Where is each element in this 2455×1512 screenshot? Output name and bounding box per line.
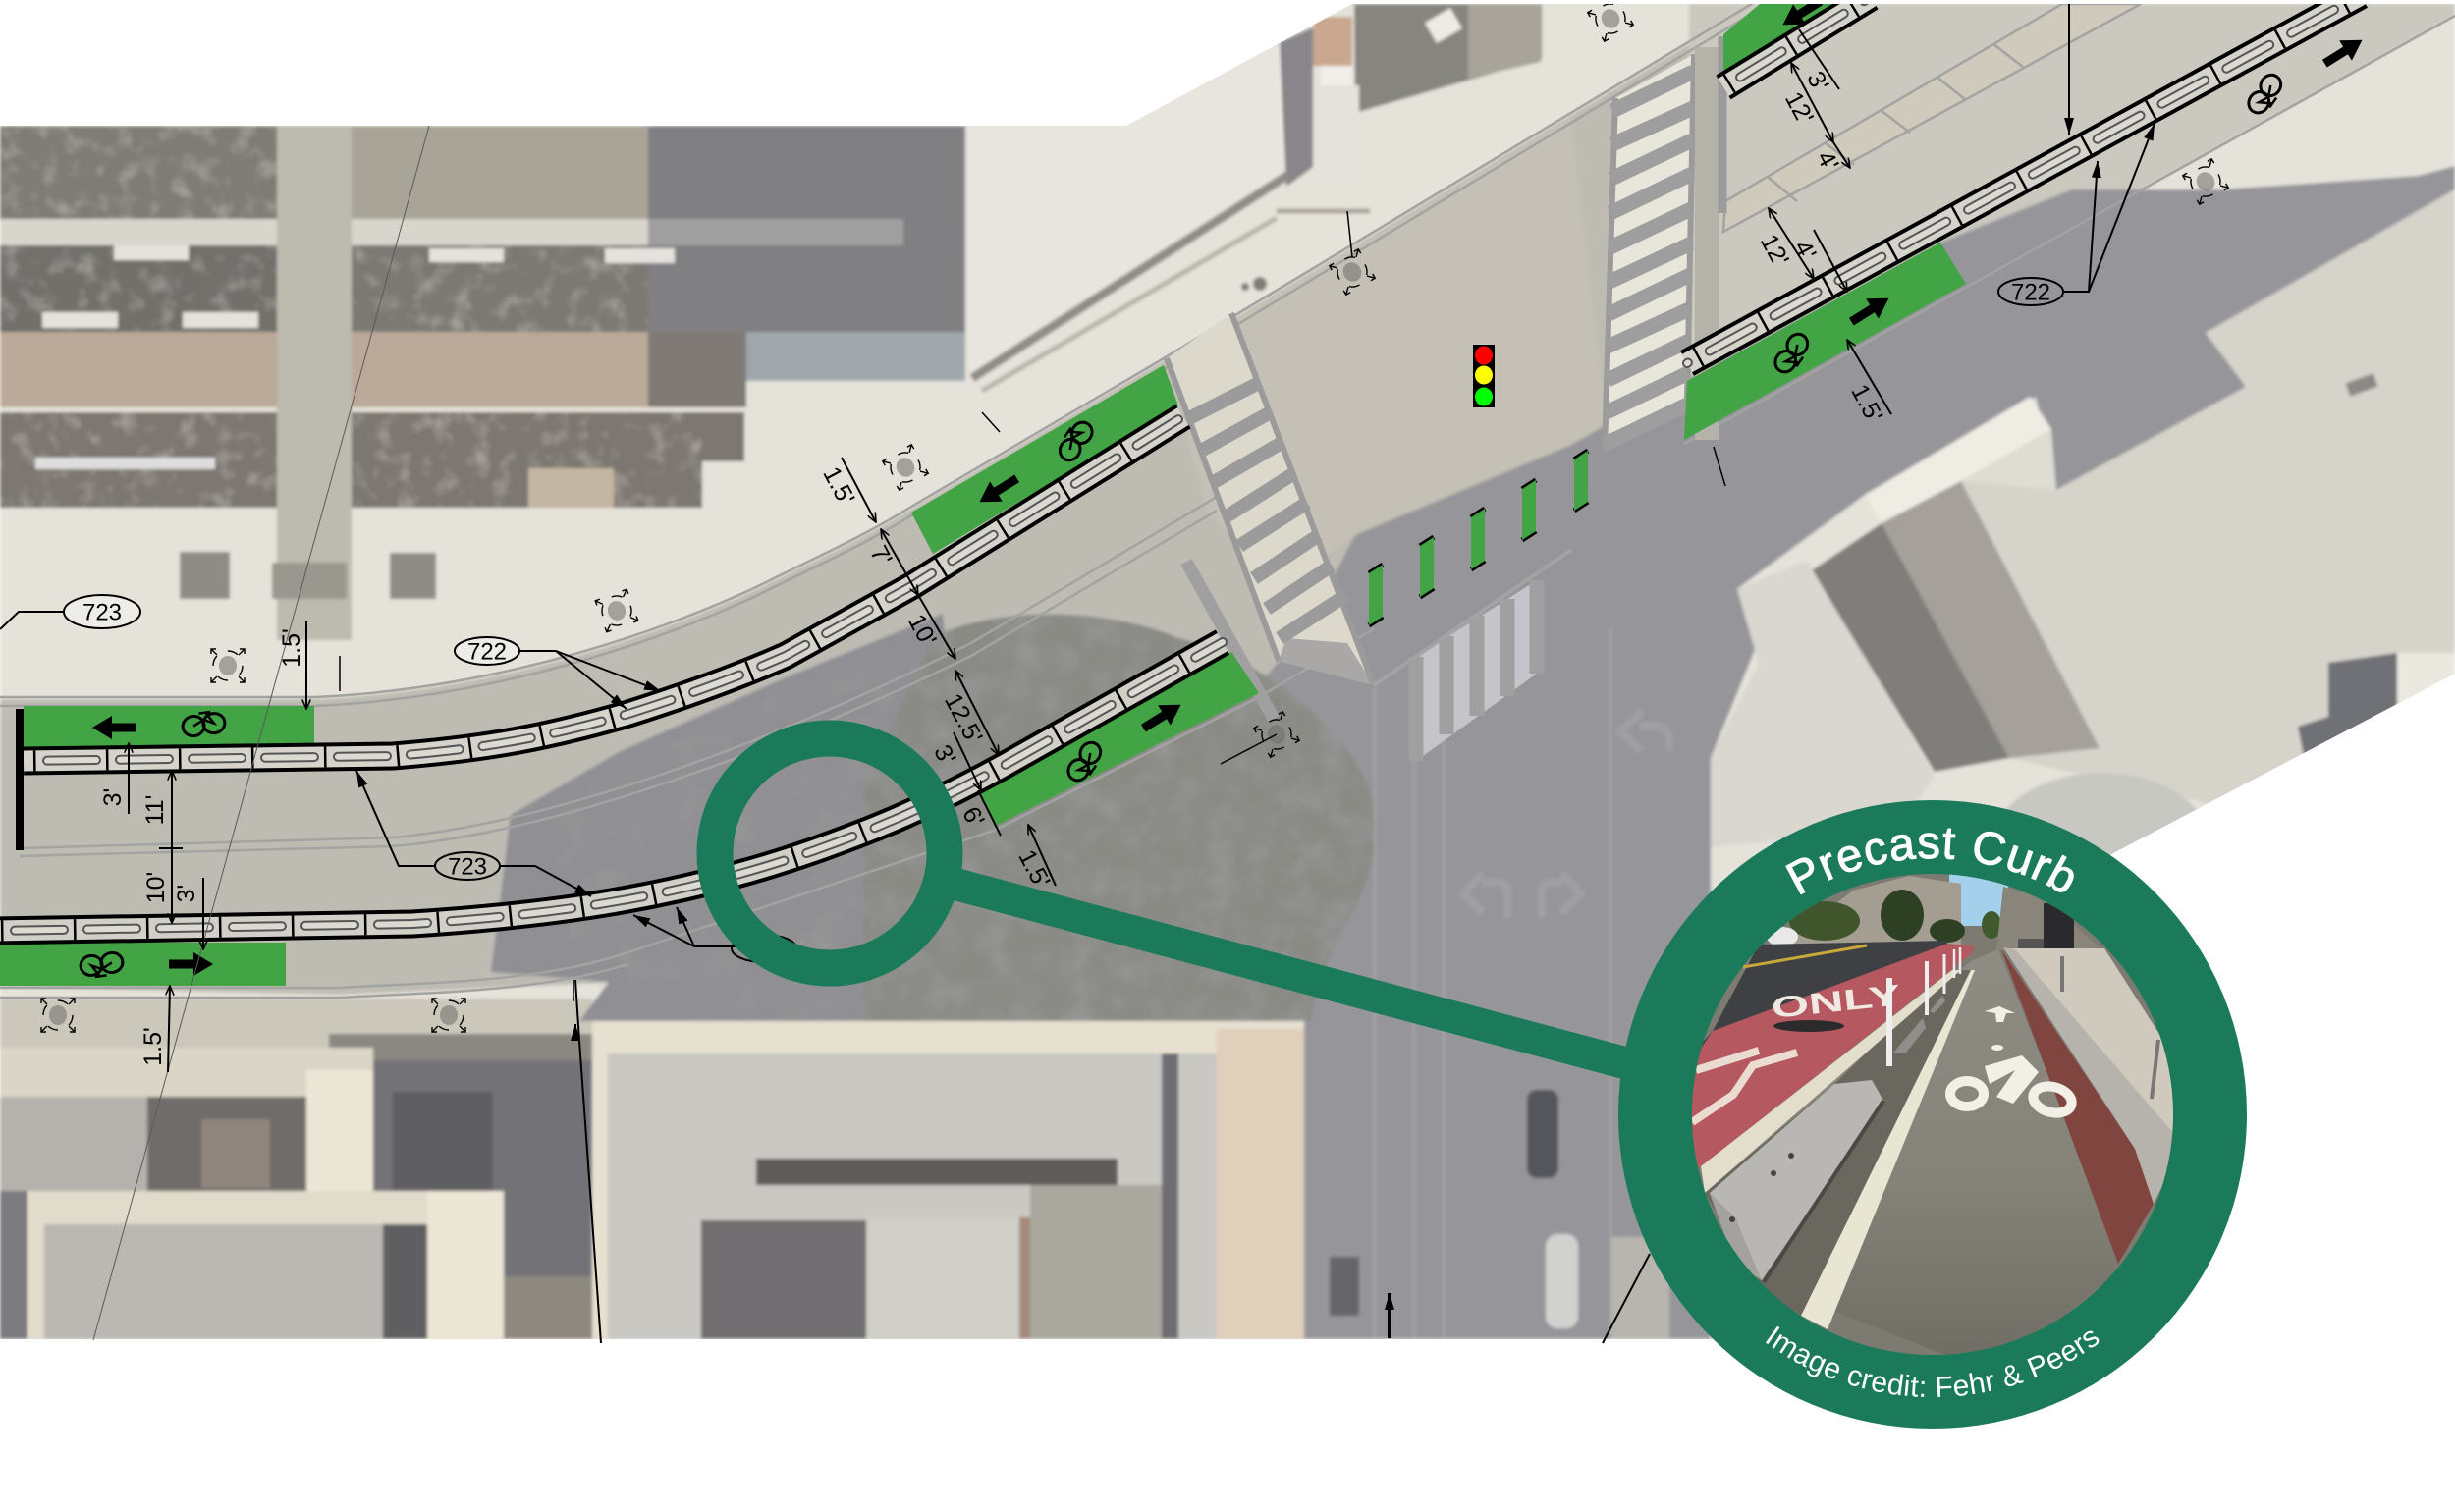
callout: magnifier ring on curb xyxy=(715,738,945,968)
label 722 north east: 722 xyxy=(2011,279,2050,306)
icons: street lights xyxy=(41,0,2228,1032)
building: south east roofs xyxy=(1711,189,2455,920)
label 723 north west xyxy=(64,595,140,628)
dimension values: 1.5' xyxy=(278,628,305,668)
dimension values: 10' xyxy=(902,610,942,651)
label 722 west xyxy=(455,637,519,666)
precast curb band: north east main xyxy=(1687,0,2361,363)
dimension values: 1.5' xyxy=(1845,380,1888,427)
road surface xyxy=(0,43,1691,996)
green bike lane: south diagonal xyxy=(978,652,1259,826)
dimension values: 1.5' xyxy=(139,1027,167,1066)
dimension lines and labels xyxy=(129,29,1891,1072)
building block: north west rooftops xyxy=(0,126,965,640)
callout: precast curb photo roundel xyxy=(1618,800,2247,1429)
green bike lane: west lower xyxy=(0,943,286,986)
building: south centre roof xyxy=(592,1021,1304,1339)
building: north centre roof xyxy=(967,4,1542,391)
dashed green bike crossing xyxy=(1369,451,1588,625)
dimension values: 3' xyxy=(173,885,200,902)
icons: bikes in lanes xyxy=(80,71,2286,979)
label 723 centre xyxy=(435,852,500,880)
green bike lane: north east diagonal xyxy=(1684,243,1966,440)
survey line xyxy=(93,126,429,1340)
crosswalk: north west leg xyxy=(1167,313,1374,719)
dimension values: 3' xyxy=(99,788,127,806)
photo: precast curb on protected bike lane: ONLY xyxy=(1770,979,1902,1025)
crosswalk: south leg xyxy=(1374,550,1571,761)
precast curb band: north east top xyxy=(1723,0,1871,87)
dimension values: 4' xyxy=(1811,146,1844,176)
green bike lane: top xyxy=(1723,4,1850,76)
image credit: Image credit: Fehr & Peers xyxy=(1766,1325,2100,1397)
dimension values: 3' xyxy=(928,740,961,770)
tree canopy xyxy=(864,615,1377,1021)
dimension values: 12' xyxy=(1755,230,1794,271)
dimension values xyxy=(99,67,1888,1066)
dimension values: 12' xyxy=(1779,87,1819,129)
label 722 west: 722 xyxy=(467,638,507,666)
road curb and median linework xyxy=(0,2,2455,998)
lower west sidewalk and buildings xyxy=(0,999,592,1339)
precast curb band: west lower xyxy=(0,642,1223,931)
callout: connector line xyxy=(957,885,1630,1064)
black stop bar xyxy=(16,709,24,850)
photo: precast curb on protected bike lane xyxy=(1692,874,2173,1355)
dimension values: 11' xyxy=(141,795,169,825)
crosswalk: north east leg xyxy=(1605,36,1722,451)
dimension values: 7' xyxy=(864,541,898,570)
dimension values: 3' xyxy=(1801,67,1834,96)
dimension values: 1.5' xyxy=(817,462,860,510)
label 722 hidden by ring xyxy=(732,935,796,962)
credit arc xyxy=(1650,1114,2215,1397)
shadow of buildings across intersection and south street xyxy=(1228,166,2455,1339)
green bike lane: north west diagonal xyxy=(911,365,1178,554)
tree canopy shadow xyxy=(491,614,982,1021)
label 723 centre: 723 xyxy=(448,854,487,880)
title: Precast Curb: Precast Curb xyxy=(1785,829,2074,895)
label 723 north west: 723 xyxy=(82,599,122,626)
dimension values: 4' xyxy=(1788,236,1822,265)
icon: traffic signal xyxy=(1473,345,1495,407)
south street details xyxy=(1330,628,1669,1339)
label 722 north east xyxy=(1998,278,2063,306)
dimension values: 10' xyxy=(142,872,170,903)
leader lines xyxy=(0,4,2155,1343)
title arc xyxy=(1676,858,2189,1114)
dimension values: 1.5' xyxy=(1012,845,1056,892)
icons: direction arrows xyxy=(92,0,2369,976)
dimension values: 6' xyxy=(956,802,990,832)
precast curb band: west upper xyxy=(24,416,1183,761)
dimension values: 12.5' xyxy=(939,689,988,748)
green bike lane: west upper xyxy=(24,706,314,749)
